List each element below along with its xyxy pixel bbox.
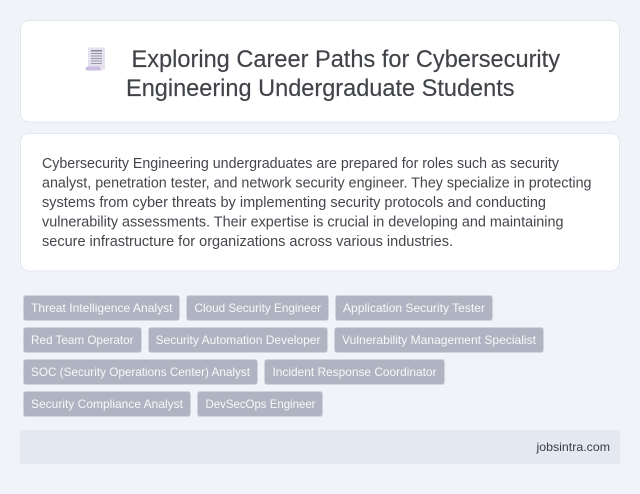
tag: Security Compliance Analyst [31,397,184,411]
tag: Incident Response Coordinator [272,365,436,379]
text block: description: secure infrastructure for organizations across various industries. [42,234,453,250]
text block: description: systems from cyber threats by implementing security protocols and conducting [42,195,546,211]
panel: header [20,20,620,122]
tag [198,392,322,416]
title: Exploring Career Paths for Cybersecurity [132,46,560,73]
text block: description: Cybersecurity Engineering undergraduates are prepared for roles such as security [42,156,560,172]
title: Engineering Undergraduate Students [126,75,514,102]
text block: description [42,156,592,250]
tag [148,328,328,352]
tag [24,392,190,416]
tag: Security Automation Developer [156,333,320,347]
text block: description: analyst, penetration tester, and network security engineer. They specialize in protecting [42,176,592,192]
icon: document scroll [86,48,105,70]
footer bar [20,430,620,464]
tag: Cloud Security Engineer [194,301,321,315]
tag [186,296,328,320]
tag: Application Security Tester [343,301,485,315]
tag [24,296,180,320]
tag: Vulnerability Management Specialist [342,333,537,347]
tag: SOC (Security Operations Center) Analyst [31,365,251,379]
panel: description [20,134,620,271]
tag [24,328,142,352]
tag: Threat Intelligence Analyst [31,301,173,315]
tag [334,328,544,352]
title [126,46,560,102]
footer source text: jobsintra.com [535,440,610,454]
panel: career tags [24,296,544,416]
tag: DevSecOps Engineer [206,397,316,411]
tag [24,360,258,384]
tag: Red Team Operator [31,333,134,347]
tag [336,296,492,320]
text block: description: vulnerability assessments. Their expertise is crucial in developing and maintaining [42,214,564,230]
tag [264,360,444,384]
